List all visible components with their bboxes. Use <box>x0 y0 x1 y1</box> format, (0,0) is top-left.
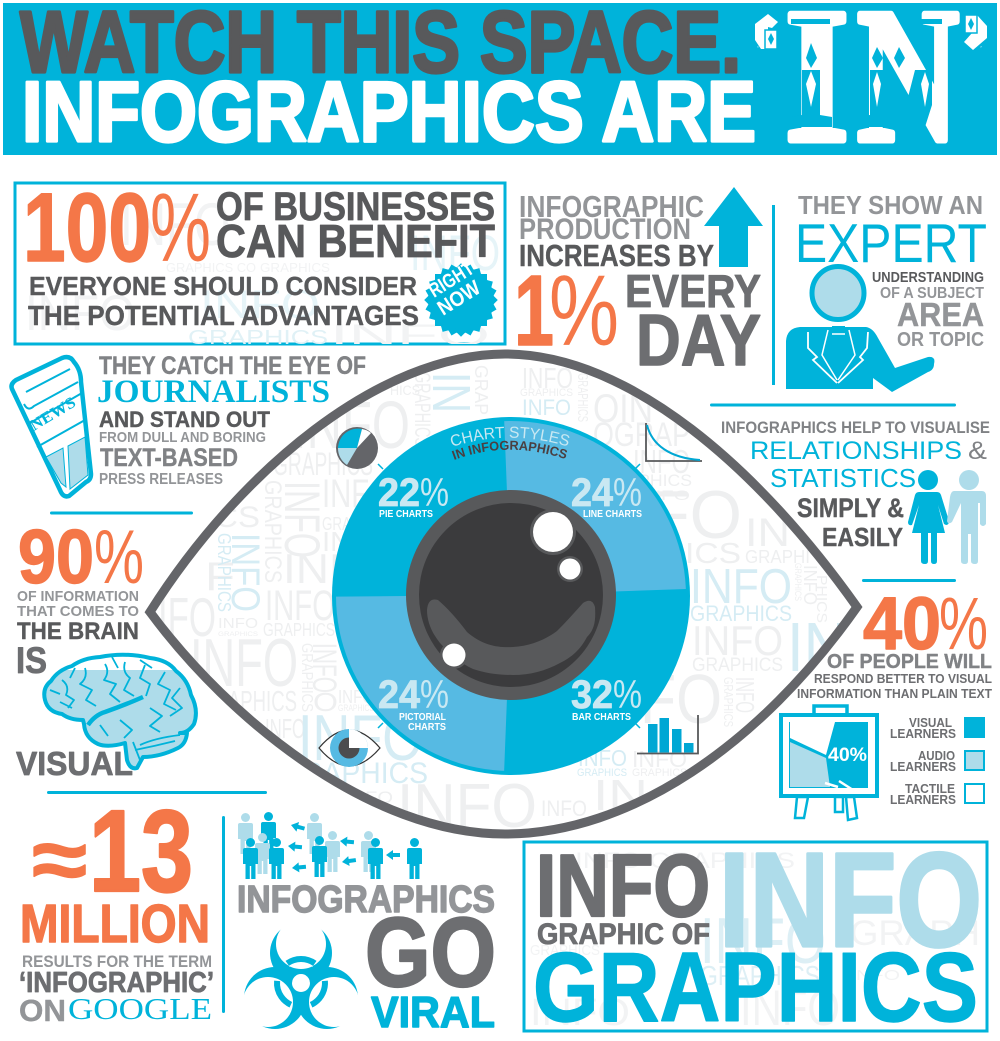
faint word cloud: PHICS <box>813 575 830 623</box>
faint word cloud: GRAPHICS <box>577 767 627 779</box>
faint word cloud: GRAPHICS <box>218 632 258 638</box>
go word: GO <box>365 897 496 1007</box>
faint word cloud: INFO <box>730 677 760 713</box>
faint word cloud: GRAPHICS <box>322 514 392 534</box>
icon: woman <box>908 470 949 564</box>
big number 90%: % <box>94 515 144 600</box>
stat: line charts 24%: % <box>613 471 642 515</box>
understanding text: OR TOPIC <box>897 329 984 351</box>
faint word cloud: GRAPHICS <box>214 533 234 612</box>
faint word cloud: INFO <box>397 772 537 841</box>
viral word: VIRAL <box>371 988 495 1037</box>
journalist text: THEY CATCH THE EYE OF <box>99 352 366 380</box>
faint word cloud: FO <box>640 660 722 738</box>
stat: pie charts 22% <box>378 471 449 520</box>
panel: newspaper and journalists <box>12 352 366 496</box>
faint word cloud: GRAPHICS <box>280 757 428 790</box>
panel: show an expert: THEY SHOW AN <box>798 190 983 220</box>
faint word texture: INFO <box>330 319 490 352</box>
graphic of: GRAPHIC OF <box>537 918 710 951</box>
icon: up arrow <box>704 187 763 267</box>
icon: businessman <box>786 266 934 392</box>
faint word cloud: IFO <box>158 586 216 648</box>
faint word cloud: IN <box>421 372 481 413</box>
faint word cloud: INFO <box>293 388 410 463</box>
legend: LEARNERS <box>890 759 956 774</box>
iris chart <box>332 417 690 775</box>
faint word cloud: INFO <box>322 472 392 516</box>
faint word cloud: INFO <box>223 533 267 612</box>
faint word cloud: INFO <box>322 526 392 557</box>
every day: EVERY <box>625 265 761 317</box>
every day: DAY <box>636 301 761 381</box>
faint word texture: INFO <box>120 191 230 258</box>
1 percent: % <box>549 255 619 367</box>
chart styles arc heading: CHART STYLES <box>450 426 570 446</box>
starburst badge: right now: NOW <box>433 276 485 320</box>
big number 100%: 100 <box>23 173 151 282</box>
stat: line charts 24%: 24 <box>571 471 614 515</box>
faint word texture: GRAPH <box>850 914 980 953</box>
faint word cloud: GRAPHI <box>745 547 810 567</box>
icon: small eye <box>319 729 380 767</box>
starburst badge: right now: RIGHT <box>425 258 478 302</box>
faint word cloud: INFO <box>633 443 690 480</box>
panel: 90% visual <box>16 515 196 782</box>
brain caption: IS <box>16 640 47 681</box>
journalist text: AND STAND OUT <box>99 407 271 432</box>
icon: easel chart <box>781 706 877 820</box>
understanding text <box>872 269 984 351</box>
faint word cloud: GRAPHICS <box>273 446 373 482</box>
faint word cloud: O <box>313 687 338 717</box>
icon: pie chart <box>336 427 378 469</box>
faint word cloud: INFO <box>692 617 783 664</box>
panel: show an expert <box>786 190 987 392</box>
faint word cloud: GRAP <box>471 365 491 415</box>
faint word cloud: INFO <box>190 625 298 701</box>
faint word cloud: INFO <box>274 481 330 558</box>
understanding text: UNDERSTANDING <box>872 269 984 286</box>
faint word cloud: GRAPHICS <box>574 373 591 422</box>
icon: brain <box>44 655 196 768</box>
faint word cloud: GRAPHICS <box>721 677 736 727</box>
panel: relationships and statistics: EASILY <box>822 522 903 552</box>
faint word cloud: FO <box>365 788 393 807</box>
icon: line chart <box>646 423 702 461</box>
big number 90% <box>18 515 144 600</box>
journalist text <box>97 352 366 488</box>
faint word cloud: GRAPHICS <box>690 601 792 626</box>
faint word cloud: IN <box>593 771 648 820</box>
panel: production increases <box>514 187 763 381</box>
big number 40%: 40 <box>863 582 941 665</box>
faint word cloud: INFO <box>800 565 820 605</box>
panel: go viral <box>237 812 496 1037</box>
faint word cloud: INFO <box>298 701 423 774</box>
million: MILLION <box>20 894 210 954</box>
faint word cloud: INFO <box>541 796 587 821</box>
faint word texture: GRAPHICS <box>260 260 330 275</box>
stat: bar charts 32%: % <box>613 673 642 717</box>
faint word cloud: INFO <box>578 745 627 771</box>
panel: relationships and statistics: RELATIONSHIPS <box>750 437 962 465</box>
panel: relationships and statistics: & <box>968 437 987 465</box>
legend: VISUAL <box>909 715 952 730</box>
faint word cloud: INFO <box>690 560 792 614</box>
faint word cloud: GRAPHICS <box>520 387 573 399</box>
faint word cloud: INFO <box>265 713 305 744</box>
1 percent <box>514 255 619 367</box>
faint word cloud: NFO <box>600 477 742 553</box>
everyone should consider: THE POTENTIAL ADVANTAGES <box>28 300 419 331</box>
results caption: GOOGLE <box>68 991 212 1026</box>
faint word texture: INFO <box>700 904 826 977</box>
faint word texture: INFO <box>200 283 320 327</box>
legend: AUDIO <box>918 748 955 763</box>
faint word cloud: GRAPHICS <box>632 767 687 779</box>
closing quote: ’ <box>980 46 982 52</box>
header banner <box>3 0 997 182</box>
decorative word IN <box>785 0 959 182</box>
journalist text: TEXT-BASED <box>100 444 238 472</box>
faint word texture: INFO <box>530 992 630 1034</box>
dark info word: INFO <box>536 836 710 935</box>
stat: line charts 24%: LINE CHARTS <box>583 509 642 520</box>
faint word texture <box>530 848 980 1036</box>
stat: bar charts 32% <box>571 673 642 723</box>
icon: man <box>947 470 986 564</box>
big number 100%: % <box>150 173 211 282</box>
faint word cloud: IN <box>787 608 847 686</box>
everyone should consider: EVERYONE SHOULD CONSIDER <box>29 271 417 301</box>
opening quote <box>755 14 778 52</box>
faint word cloud: IN <box>745 511 790 555</box>
panel: 100% of businesses <box>15 173 505 352</box>
1 percent: 1 <box>514 255 554 367</box>
production text: INCREASES BY <box>519 238 714 273</box>
production text: INFOGRAPHIC <box>519 189 704 224</box>
faint word cloud: INFO <box>640 487 690 503</box>
icon: easel chart: 40% <box>828 745 867 766</box>
panel: relationships and statistics <box>721 419 990 564</box>
faint word texture: INFO <box>410 225 500 281</box>
faint word cloud: INFO <box>265 582 335 630</box>
opening quote: ‘ <box>757 45 759 52</box>
legend: LEARNERS <box>890 792 956 807</box>
icon: biohazard <box>244 922 358 1029</box>
panel: 13 million <box>19 786 214 1028</box>
brain caption: THE BRAIN <box>17 618 139 645</box>
big number 90%: 90 <box>18 515 94 600</box>
faint word cloud: OGRAP <box>593 416 690 454</box>
icon: spreading people <box>238 812 422 879</box>
journalist text: PRESS RELEASES <box>99 471 223 488</box>
approximate sign: ≈ <box>32 812 87 908</box>
of businesses can benefit: OF BUSINESSES <box>216 185 495 229</box>
stat: pictorial charts 24%: PICTORIAL <box>399 712 446 723</box>
faint word texture: GRAPHICS <box>700 960 820 991</box>
faint word texture: GRAPHICS <box>530 942 600 959</box>
every day <box>625 265 761 381</box>
everyone should consider <box>28 271 419 331</box>
faint word texture: INFO GRAPHICS <box>575 848 795 873</box>
closing quote <box>964 15 987 52</box>
icon: newspaper <box>12 357 91 496</box>
learners caption: OF PEOPLE WILL <box>827 651 992 673</box>
of businesses can benefit <box>216 185 495 267</box>
icon: newspaper: NEWS <box>27 394 79 434</box>
infographics word: INFOGRAPHICS <box>237 879 495 921</box>
number 13: 13 <box>89 786 193 916</box>
faint word cloud: GRAPHICS <box>263 620 335 640</box>
understanding text: AREA <box>897 296 984 333</box>
panel: infographic of infographics <box>522 840 988 1032</box>
title line two: INFOGRAPHICS ARE <box>22 65 756 160</box>
brain caption: THAT COMES TO <box>17 603 139 620</box>
stat: pie charts 22%: 22 <box>378 471 420 515</box>
faint word cloud: GRAPHICS <box>410 372 435 447</box>
faint word cloud: GRAPHICS <box>200 686 297 718</box>
faint word cloud <box>158 363 847 841</box>
pupil <box>406 490 616 700</box>
faint word texture: GRAPHICS CO <box>166 260 256 275</box>
faint word cloud: GRAPHICS <box>298 643 315 712</box>
stat: pictorial charts 24% <box>378 673 449 733</box>
legend: TACTILE <box>905 781 955 796</box>
chart styles arc heading: IN INFOGRAPHICS <box>452 440 568 460</box>
learners caption <box>797 651 992 701</box>
big number 40% <box>863 582 988 665</box>
faint word texture: INFO <box>25 285 135 341</box>
faint word cloud: GRAPHICS <box>338 703 374 713</box>
faint word cloud: F <box>205 555 235 599</box>
faint word texture: INFO <box>740 980 840 1036</box>
faint word cloud: INFO <box>338 687 374 707</box>
light quadrants <box>336 421 686 771</box>
stat: pie charts 22%: PIE CHARTS <box>379 509 433 520</box>
stat: pie charts 22%: % <box>420 471 449 515</box>
results caption: RESULTS FOR THE TERM <box>22 952 212 971</box>
legend <box>890 715 985 807</box>
understanding text: OF A SUBJECT <box>880 285 984 302</box>
journalist text: FROM DULL AND BORING <box>99 429 266 446</box>
visual word: VISUAL <box>16 745 133 782</box>
panel: relationships and statistics: STATISTICS <box>770 463 916 493</box>
stat: bar charts 32%: BAR CHARTS <box>572 712 631 723</box>
production text: PRODUCTION <box>519 213 691 246</box>
faint word cloud: INFO <box>283 545 393 592</box>
chart styles arc heading <box>450 426 570 460</box>
faint word cloud: ICS <box>205 501 260 534</box>
faint word texture: GRAPHICS <box>188 327 328 349</box>
brain caption <box>16 588 139 681</box>
production text <box>519 189 714 273</box>
faint word cloud: INFO <box>218 615 258 632</box>
panel: 40% of people <box>781 582 992 820</box>
icon: bar chart <box>637 715 698 754</box>
faint word cloud: INFO <box>632 746 687 772</box>
faint word cloud: GRAPHICS <box>600 471 692 490</box>
stat: line charts 24% <box>571 471 642 520</box>
eye <box>144 350 862 838</box>
results caption: ‘INFOGRAPHIC’ <box>19 967 214 999</box>
eye outline <box>150 354 857 834</box>
stat: pictorial charts 24%: CHARTS <box>408 722 446 733</box>
faint word cloud: ICS <box>685 538 741 570</box>
stat: bar charts 32%: 32 <box>571 673 613 717</box>
of businesses can benefit: CAN BENEFIT <box>216 215 495 267</box>
panel: relationships and statistics: SIMPLY & <box>797 493 904 523</box>
faint word cloud: HICS <box>390 382 420 398</box>
journalist text: JOURNALISTS <box>97 374 330 410</box>
faint word cloud: INFO <box>522 395 571 420</box>
faint word cloud: INFO <box>522 363 573 395</box>
faint word texture <box>30 203 498 344</box>
legend: LEARNERS <box>890 726 956 741</box>
faint word cloud: INFO <box>305 643 343 693</box>
results caption <box>19 952 214 1028</box>
faint word cloud: OIN <box>593 387 653 431</box>
stat: pictorial charts 24%: 24 <box>378 673 421 717</box>
results caption: ON <box>19 993 66 1028</box>
faint word texture: INFO <box>850 967 900 984</box>
faint word cloud: GRAPHICS <box>259 480 286 583</box>
stat: pictorial charts 24%: % <box>420 673 449 717</box>
faint word cloud: GRAPHICS <box>692 655 783 676</box>
brain caption: OF INFORMATION <box>17 588 139 605</box>
starburst badge: right now <box>424 258 498 337</box>
faint word cloud: GRAPHICS <box>793 563 803 601</box>
